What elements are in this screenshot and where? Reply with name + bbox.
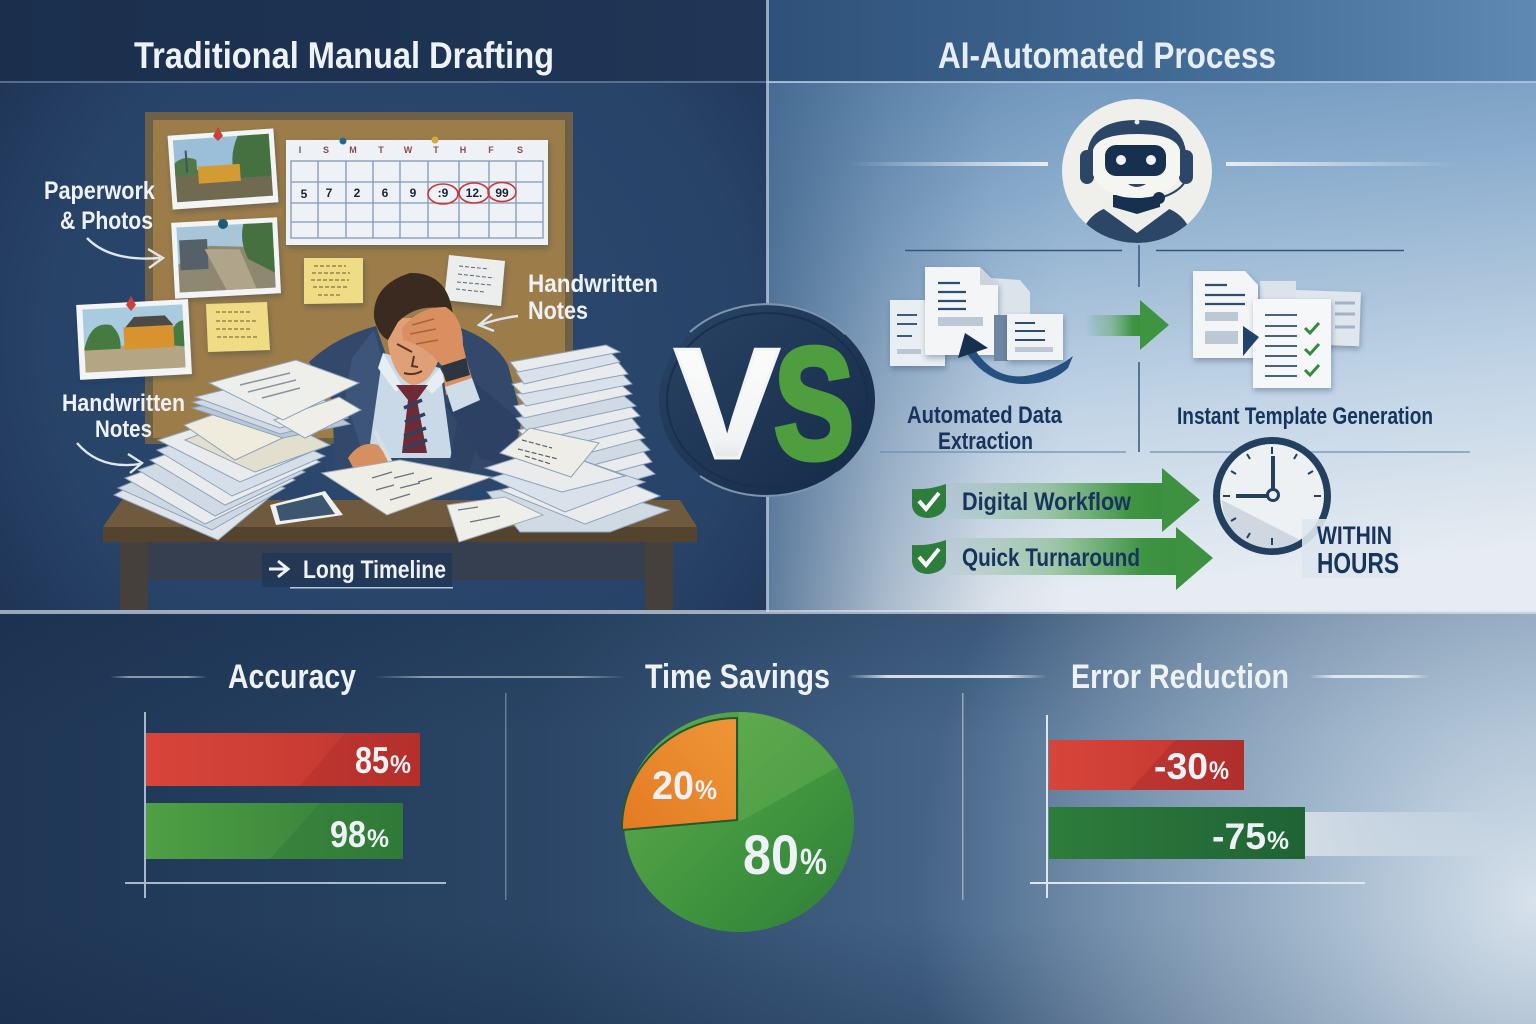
illustration: stressed man (309, 273, 522, 478)
label: within hours (1302, 519, 1400, 580)
calendar (286, 136, 548, 245)
bar: AI 98%: 98 (330, 814, 366, 855)
panel: metrics background (0, 610, 1536, 1024)
bar: manual 85%: 85 (355, 740, 389, 781)
label: handwritten notes right (528, 270, 658, 325)
photo: site photo 3 (76, 299, 192, 380)
handwriting on loose note (518, 440, 558, 464)
arrow: to note (479, 314, 518, 331)
label: long timeline (262, 553, 453, 588)
icon: check quick turnaround (912, 540, 946, 574)
face (388, 318, 442, 385)
raised sleeve (446, 385, 520, 468)
calendar: W (404, 145, 413, 155)
heading: time savings: Time Savings (645, 658, 830, 696)
illustration: desk (103, 500, 697, 610)
calendar: :9 (438, 186, 449, 200)
pin (218, 219, 228, 229)
label: within hours: WITHIN (1317, 522, 1392, 550)
shirt cuff (445, 378, 480, 412)
suit (309, 326, 522, 470)
VS badge: V (674, 316, 780, 492)
arrow: digital workflow (945, 468, 1200, 532)
calendar: 5 (301, 187, 308, 201)
heading: traditional manual drafting: Traditional Manual Drafting (134, 35, 554, 76)
bar: AI -75%: -75 (1212, 816, 1266, 857)
icon: check digital workflow (912, 484, 946, 518)
calendar: 99 (495, 186, 509, 200)
bar: AI 98%: % (367, 825, 389, 853)
label: automated data extraction: Automated Data (907, 402, 1063, 429)
tie (396, 385, 428, 453)
bar: manual 85% (146, 733, 420, 786)
label: handwritten notes left: Handwritten (62, 390, 185, 417)
label: instant template generation: Instant Template Generation (1177, 403, 1433, 430)
icon: clock (1213, 437, 1331, 555)
slice label: 80%: 80 (743, 823, 799, 886)
text lines on top sheet (240, 373, 300, 398)
hair (374, 273, 453, 340)
pin (126, 296, 136, 311)
calendar: H (460, 145, 466, 155)
icon: AI robot avatar (1062, 99, 1212, 243)
calendar: M (349, 145, 357, 155)
shirt (368, 353, 452, 458)
slice: 20%: % (695, 775, 717, 805)
label: paperwork and photos: Paperwork (44, 177, 155, 205)
calendar: S (323, 145, 329, 155)
label: long timeline: Long Timeline (303, 556, 446, 584)
bar chart: accuracy (125, 712, 446, 898)
calendar: 6 (382, 186, 389, 200)
icon: automated data extraction documents (890, 267, 1073, 384)
pen (375, 431, 398, 477)
sticky note (304, 258, 363, 304)
heading: error reduction: Error Reduction (1071, 658, 1289, 696)
sticky note (206, 302, 270, 352)
label: handwritten notes right: Notes (528, 297, 588, 325)
connector lines: AI panel (850, 162, 1470, 452)
bar: manual 85%: % (390, 751, 411, 779)
illustration: left paper stack (114, 360, 361, 540)
photo: site photo 2 (171, 217, 281, 299)
VS badge (659, 304, 875, 496)
arrow: quick turnaround (945, 527, 1213, 590)
bar: AI -75%: % (1267, 827, 1289, 855)
bar: AI 98% (146, 803, 403, 859)
heading: AI-automated process: AI-Automated Process (938, 35, 1276, 76)
illustration: corkboard (145, 112, 573, 444)
calendar: S (517, 145, 523, 155)
white note (444, 255, 505, 306)
calendar: T (378, 145, 384, 155)
bar: manual -30% (1049, 740, 1244, 790)
slice: 20%: 20 (652, 764, 694, 808)
heading: accuracy: Accuracy (228, 658, 356, 696)
label: handwritten notes left: Notes (95, 416, 152, 443)
panel: traditional manual drafting background (0, 0, 767, 612)
VS badge: S (774, 316, 854, 492)
arrow: extraction to template (1085, 300, 1169, 350)
label: paperwork and photos: & Photos (60, 207, 153, 235)
panel: AI-automated process background (766, 0, 1536, 612)
label: paperwork and photos (44, 177, 155, 235)
label: digital workflow: Digital Workflow (962, 488, 1131, 516)
hand on forehead (402, 307, 474, 395)
bar: manual -30%: % (1209, 757, 1229, 785)
illustration: tablet (270, 491, 343, 525)
calendar: 9 (410, 186, 417, 200)
bar: AI -75% (1049, 807, 1305, 859)
calendar: I (299, 145, 301, 155)
label: within hours: HOURS (1317, 548, 1399, 580)
calendar: 2 (354, 186, 361, 200)
illustration: paper being written on (322, 460, 543, 542)
photo: site photo 1 (168, 128, 278, 210)
calendar: 7 (326, 186, 333, 200)
label: automated data extraction (907, 402, 1063, 455)
calendar: 12. (466, 186, 482, 200)
slice label: 80%: % (800, 841, 827, 882)
section dividers and heading rules (110, 675, 1430, 900)
arrow: to paper pile (77, 443, 142, 473)
label: quick turnaround: Quick Turnaround (962, 544, 1140, 572)
slice: 20% (622, 718, 737, 830)
writing hand (348, 444, 398, 478)
arrow: to photos (87, 238, 163, 268)
calendar: T (433, 145, 439, 155)
watch (441, 358, 470, 382)
icon: instant template generation documents (1193, 271, 1361, 388)
label: handwritten notes right: Handwritten (528, 270, 658, 298)
illustration: right paper stack (485, 345, 669, 532)
bar chart: error reduction (1030, 715, 1500, 898)
calendar: F (488, 145, 494, 155)
label: automated data extraction: Extraction (938, 428, 1033, 455)
label: handwritten notes left (62, 390, 185, 443)
pin (213, 127, 223, 141)
pie chart: time savings (622, 712, 854, 932)
bar: manual -30%: -30 (1154, 746, 1208, 787)
